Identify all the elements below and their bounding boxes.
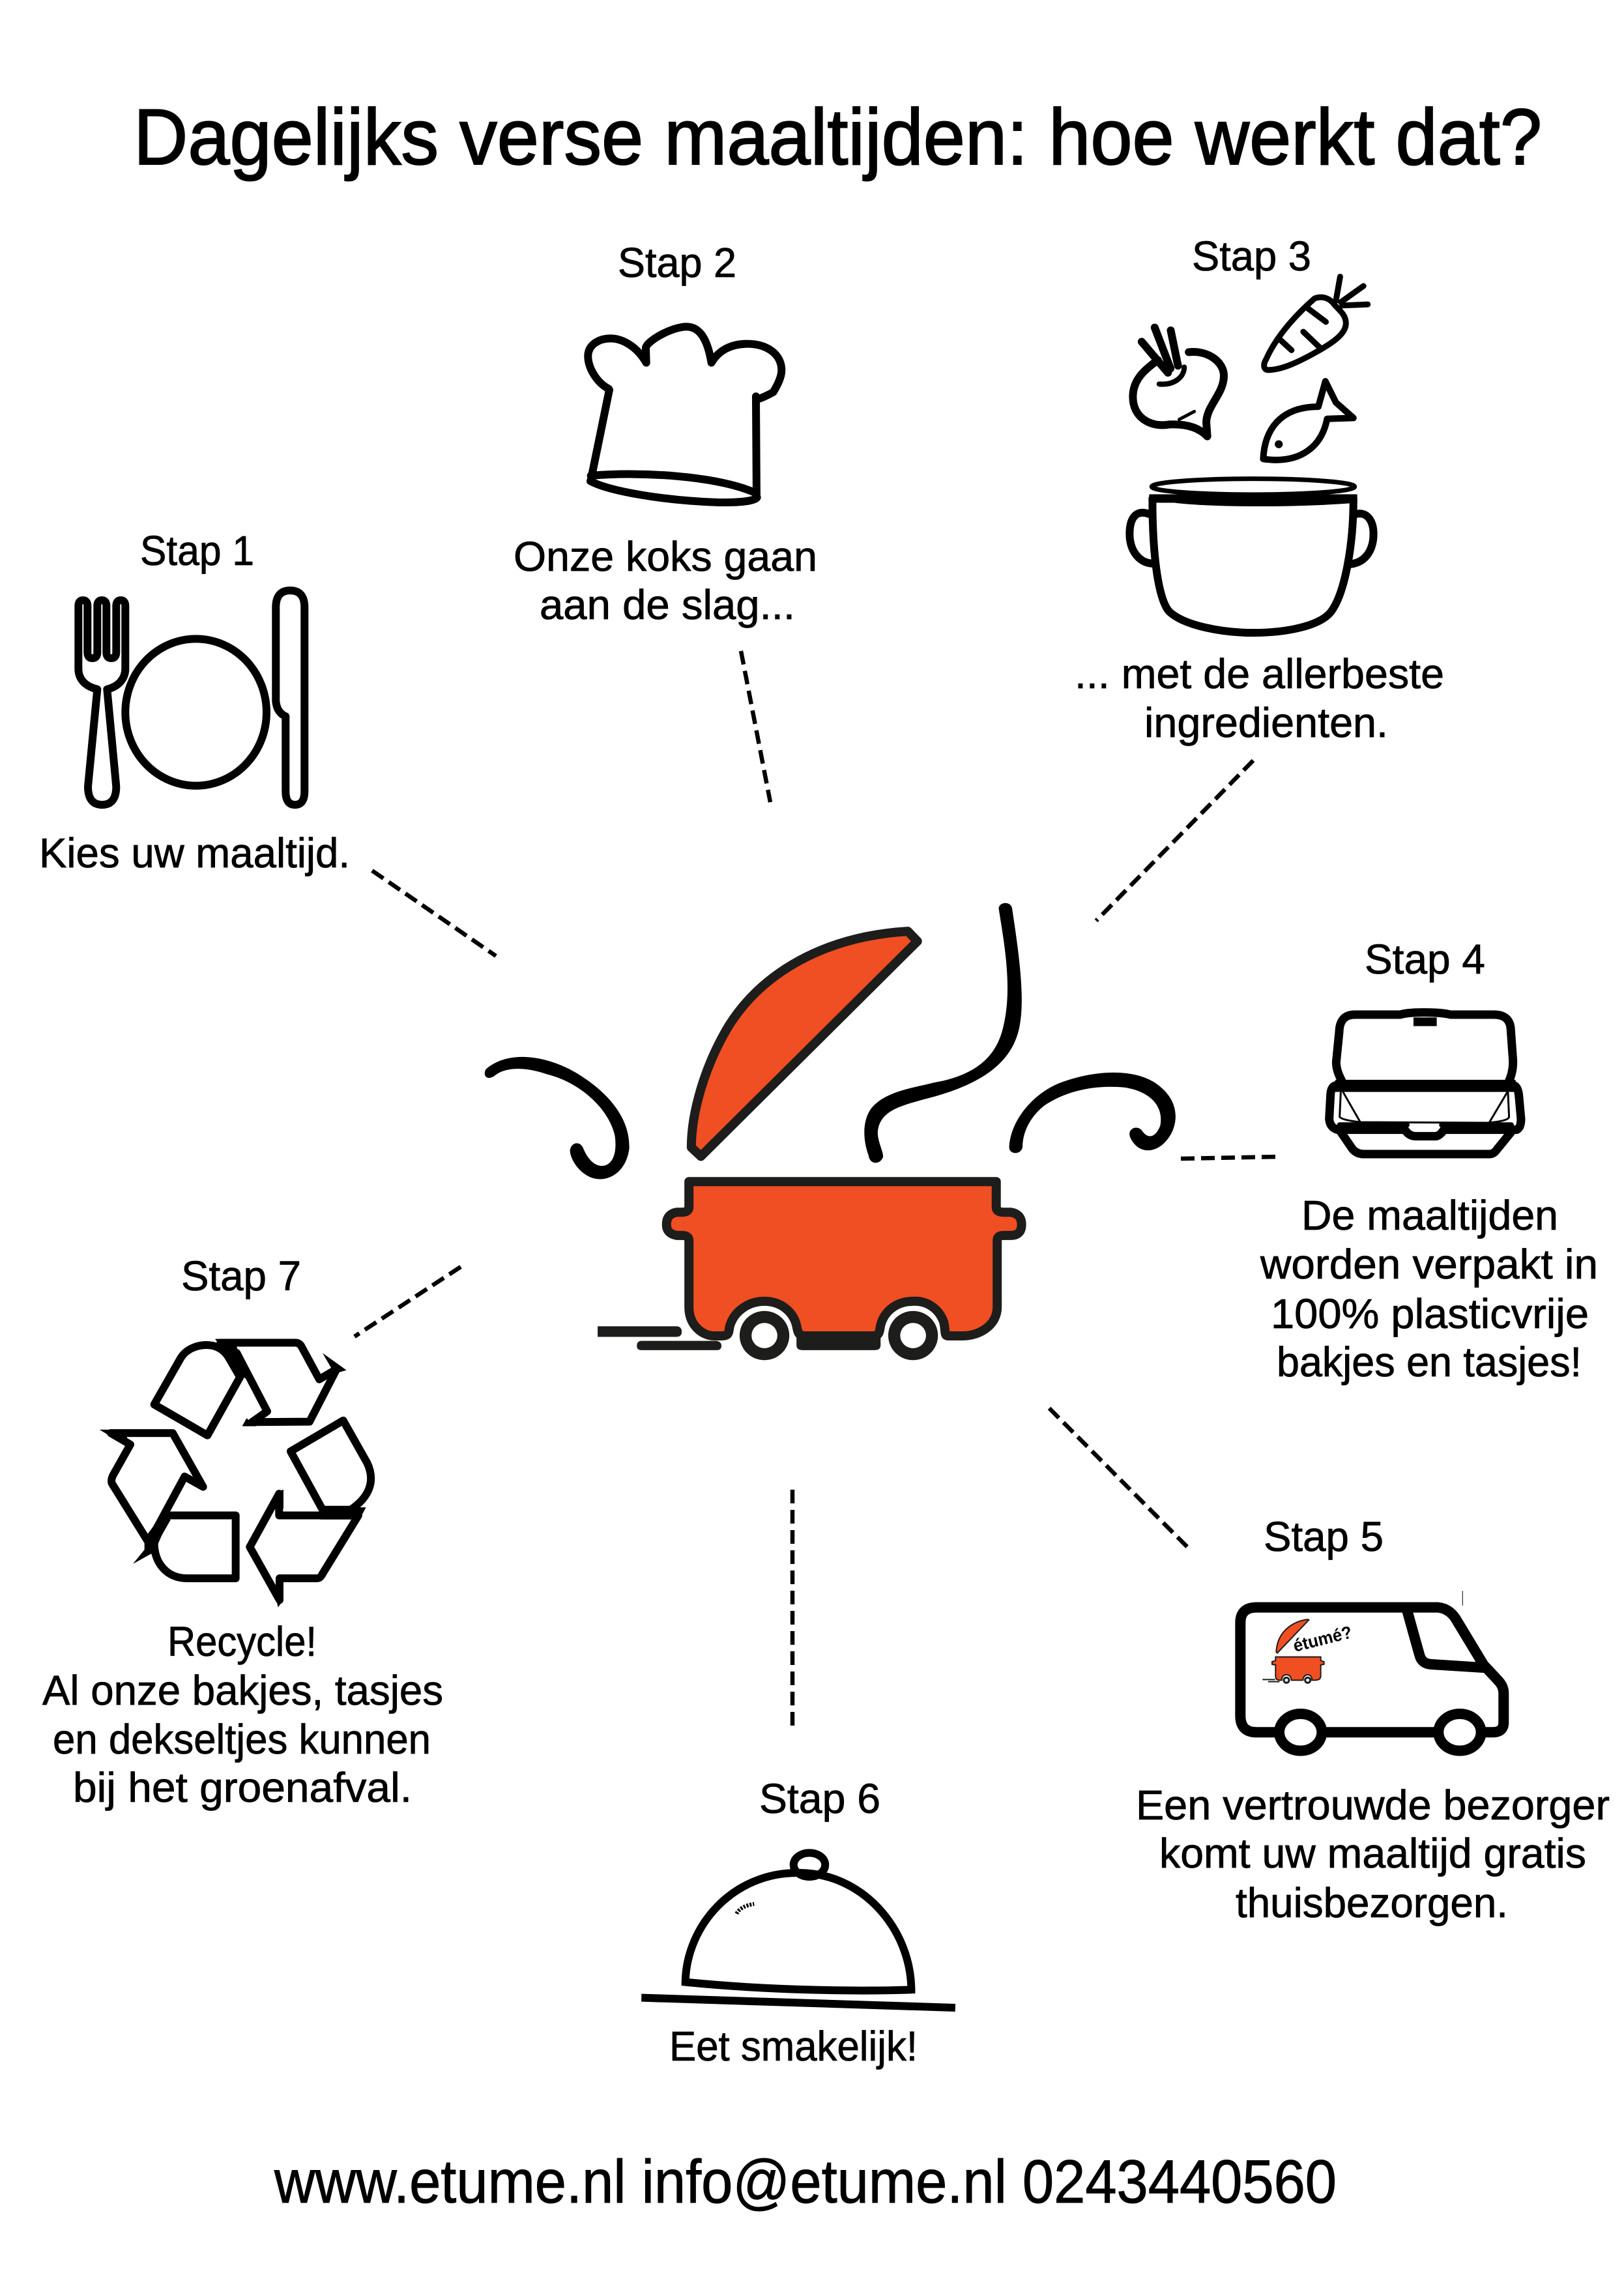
central logo: pot with lid and steam bbox=[485, 903, 1176, 1360]
icon: turnip bbox=[1133, 328, 1224, 437]
dashed connector: step 6 bbox=[790, 1490, 794, 1729]
heading: stap 1: Stap 1 bbox=[140, 527, 254, 574]
steam middle bbox=[864, 903, 1022, 1163]
steam left bbox=[485, 1057, 630, 1179]
text: step 5: thuisbezorgen. bbox=[1236, 1879, 1508, 1926]
panel: step 2 bbox=[514, 239, 817, 628]
heading: stap 4: Stap 4 bbox=[1365, 936, 1485, 983]
text: step 4 bbox=[1260, 1192, 1598, 1385]
text: step 4: worden verpakt in bbox=[1260, 1241, 1598, 1288]
panel: step 5 bbox=[1136, 1513, 1610, 1926]
heading: stap 3: Stap 3 bbox=[1192, 233, 1311, 280]
text: step 7: Al onze bakjes, tasjes bbox=[42, 1667, 443, 1714]
van body bbox=[1240, 1591, 1503, 1751]
speed lines bbox=[598, 1326, 721, 1350]
heading: stap 7: Stap 7 bbox=[181, 1252, 301, 1299]
wheel left bbox=[740, 1311, 789, 1360]
title: Dagelijks verse maaltijden: hoe werkt dat? bbox=[134, 93, 1542, 181]
text: step 4: 100% plasticvrije bbox=[1271, 1290, 1589, 1337]
pot bbox=[667, 1181, 1022, 1336]
footer contact line: www.etume.nl info@etume.nl 0243440560 bbox=[274, 2147, 1337, 2216]
icon: chef hat bbox=[588, 326, 781, 502]
dashed connector: step 4 bbox=[1181, 1157, 1280, 1159]
text: step 2: Onze koks gaan bbox=[514, 533, 817, 580]
logo text: étumé? bbox=[1291, 1622, 1354, 1656]
text: step 1: Kies uw maaltijd. bbox=[39, 830, 350, 876]
text: step 2 bbox=[514, 533, 817, 628]
text: step 4: De maaltijden bbox=[1301, 1192, 1558, 1239]
dashed connector: step 5 bbox=[1049, 1408, 1188, 1548]
panel: step 1 bbox=[39, 527, 350, 876]
icon: cloche bbox=[641, 1853, 955, 2008]
heading: stap 6: Stap 6 bbox=[759, 1775, 880, 1822]
panel: step 6 bbox=[641, 1775, 955, 2070]
text: step 4: bakjes en tasjes! bbox=[1277, 1338, 1582, 1385]
text: step 5: Een vertrouwde bezorger bbox=[1136, 1782, 1610, 1829]
text: step 5: komt uw maaltijd gratis bbox=[1159, 1830, 1586, 1877]
panel: step 3 bbox=[1075, 233, 1444, 746]
dashed connector: step 1 bbox=[372, 871, 496, 956]
dashed connector: step 7 bbox=[355, 1267, 461, 1337]
icon: fish bbox=[1263, 381, 1354, 460]
panel: step 4 bbox=[1260, 936, 1598, 1385]
text: step 7 bbox=[42, 1618, 443, 1811]
heading: stap 5: Stap 5 bbox=[1264, 1513, 1384, 1560]
wheel right bbox=[888, 1311, 938, 1360]
icon: takeaway box bbox=[1329, 1013, 1521, 1154]
axle bbox=[796, 1336, 880, 1350]
text: step 6: Eet smakelijk! bbox=[669, 2023, 918, 2070]
icon: fork, plate and knife bbox=[78, 590, 304, 805]
lid bbox=[691, 931, 918, 1156]
text: step 7: Recycle! bbox=[167, 1618, 317, 1665]
panel: step 7 bbox=[42, 1252, 443, 1811]
text: step 5 bbox=[1136, 1782, 1610, 1926]
icon: delivery van bbox=[1240, 1591, 1503, 1751]
steam right bbox=[1009, 1073, 1176, 1153]
text: step 3: ... met de allerbeste bbox=[1075, 650, 1444, 697]
icon: carrot bbox=[1264, 277, 1368, 370]
icon: cooking pot bbox=[1129, 479, 1374, 633]
dashed connector: step 2 bbox=[741, 651, 770, 802]
text: step 3 bbox=[1075, 650, 1444, 746]
text: step 7: en dekseltjes kunnen bbox=[53, 1716, 431, 1763]
dashed connector: step 3 bbox=[1096, 760, 1253, 921]
icon: recycling arrows bbox=[100, 1339, 371, 1608]
text: step 7: bij het groenafval. bbox=[73, 1764, 412, 1811]
icon: ingredients and pot bbox=[1129, 277, 1374, 633]
mini étumé logo bbox=[1262, 1619, 1324, 1683]
text: step 2: aan de slag... bbox=[540, 581, 795, 628]
text: step 3: ingredienten. bbox=[1144, 699, 1388, 746]
heading: stap 2: Stap 2 bbox=[618, 239, 736, 286]
